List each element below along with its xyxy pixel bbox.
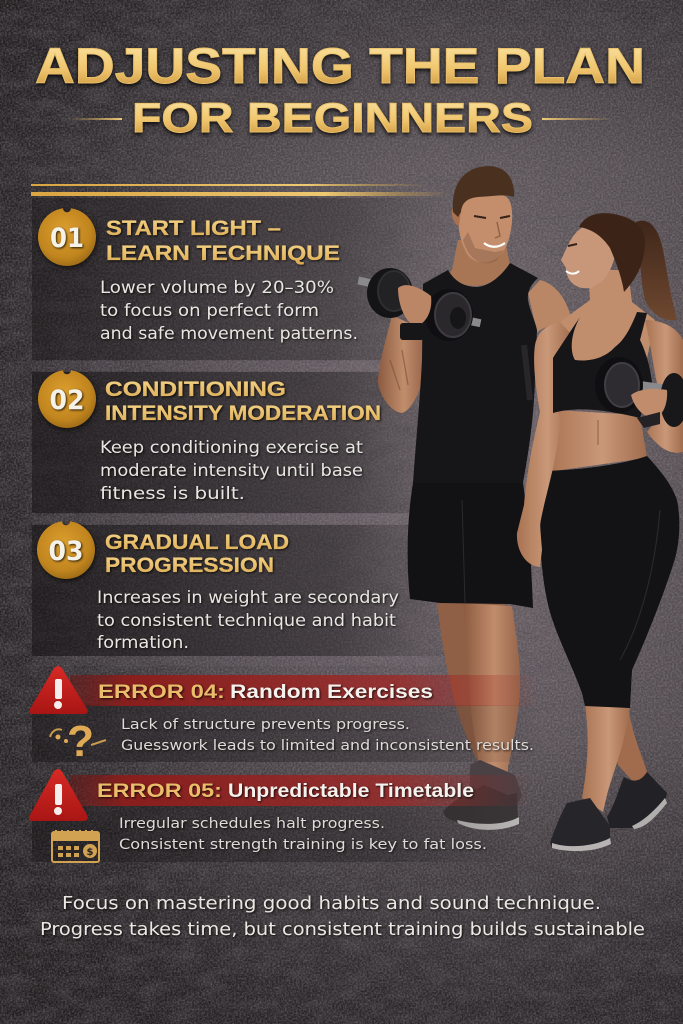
man face detail [474,216,510,218]
icon: calendar with dollar: $ [87,847,94,858]
man fist and wristband [398,285,431,326]
woman ponytail [636,221,677,320]
man neck [448,240,510,286]
error 04 [29,666,542,766]
woman face detail [568,244,577,246]
dark panel 04 [32,705,542,762]
photo: woman with dumbbell [517,213,683,851]
body 1 [100,278,358,343]
man hair [453,166,514,217]
title line 1: ADJUSTING THE PLAN [35,38,645,94]
body 2 [100,438,364,503]
badge 02 [38,370,96,428]
heading 3 [105,531,289,577]
error 05 body: Consistent strength training is key to fat loss. [119,837,487,853]
panel backgrounds: tips 1 to 3 [32,198,472,666]
woman leggings [540,456,679,708]
badge 01: 01 [50,223,84,254]
tip 1 [38,208,358,343]
title line 2: FOR BEGINNERS [132,94,533,141]
man head [458,194,512,263]
woman dumbbell [595,357,683,427]
footer message: Focus on mastering good habits and sound technique. [62,893,601,914]
error 04 body [121,717,534,754]
body 3 [97,588,399,652]
body 1: to focus on perfect form [100,301,319,320]
error 05 heading: ERROR 05: [97,780,222,802]
heading 3: GRADUAL LOAD [105,531,289,554]
error 05 body: Irregular schedules halt progress. [119,816,385,832]
heading 1: LEARN TECHNIQUE [106,242,340,265]
body 3: to consistent technique and habit [97,611,397,630]
title [35,38,645,141]
red band 05 [70,775,530,806]
man shoes [470,760,522,810]
photo: man with dumbbell [357,166,572,830]
error 04 heading: ERROR 04: [98,681,225,703]
footer message: Progress takes time, but consistent training builds sustainable [40,919,645,940]
warning triangle 05 [29,769,88,821]
dark panel 05 [32,806,532,862]
body 2: moderate intensity until base [100,461,363,480]
tip 2 [38,370,381,503]
heading 2 [105,378,381,425]
error 04 heading: Random Exercises [230,681,433,703]
error 05 body [119,816,487,853]
gold divider lines [31,184,451,196]
man back leg [437,600,505,770]
error 05 [29,769,532,862]
heading 3: PROGRESSION [105,554,274,577]
body 2: Keep conditioning exercise at [100,438,364,457]
warning triangle 04 [29,666,88,714]
woman abs [547,410,647,472]
badge 01 [38,208,96,266]
heading 1: START LIGHT – [106,217,281,240]
woman head [561,225,615,288]
body 2: fitness is built. [100,484,245,503]
woman front leg [582,705,630,812]
woman sports bra [553,312,652,418]
icon: question mark [50,717,106,766]
woman viewer-right arm [645,320,683,453]
woman viewer-left arm [517,322,572,567]
woman hair [579,213,645,292]
woman chest and neck [553,270,655,368]
body 3: Increases in weight are secondary [97,588,399,607]
heading 2: CONDITIONING [105,378,286,401]
body 1: and safe movement patterns. [100,324,358,343]
man shorts [408,483,533,608]
woman shoes [607,772,667,828]
woman back leg [606,705,648,785]
error 04 body: Guesswork leads to limited and inconsistent results. [121,738,534,754]
body 3: formation. [97,633,189,652]
icon: question mark: ? [67,717,94,766]
left dumbbell [357,268,481,341]
body 1: Lower volume by 20–30% [100,278,334,297]
heading 2: INTENSITY MODERATION [105,402,381,425]
woman hand and watch [631,389,667,418]
heading 1 [106,217,340,265]
tip 3 [37,521,399,652]
man tank top [413,263,538,483]
badge 03 [37,521,95,579]
error 05 heading: Unpredictable Timetable [228,780,474,802]
badge 03: 03 [48,536,84,567]
footer message [40,893,645,940]
man front leg [463,603,520,790]
man viewer-left forearm [378,315,425,413]
man viewer-right arm [528,280,572,332]
red band 04 [70,675,540,706]
error 04 body: Lack of structure prevents progress. [121,717,410,733]
badge 02: 02 [50,385,84,416]
icon: calendar with dollar [52,830,99,862]
